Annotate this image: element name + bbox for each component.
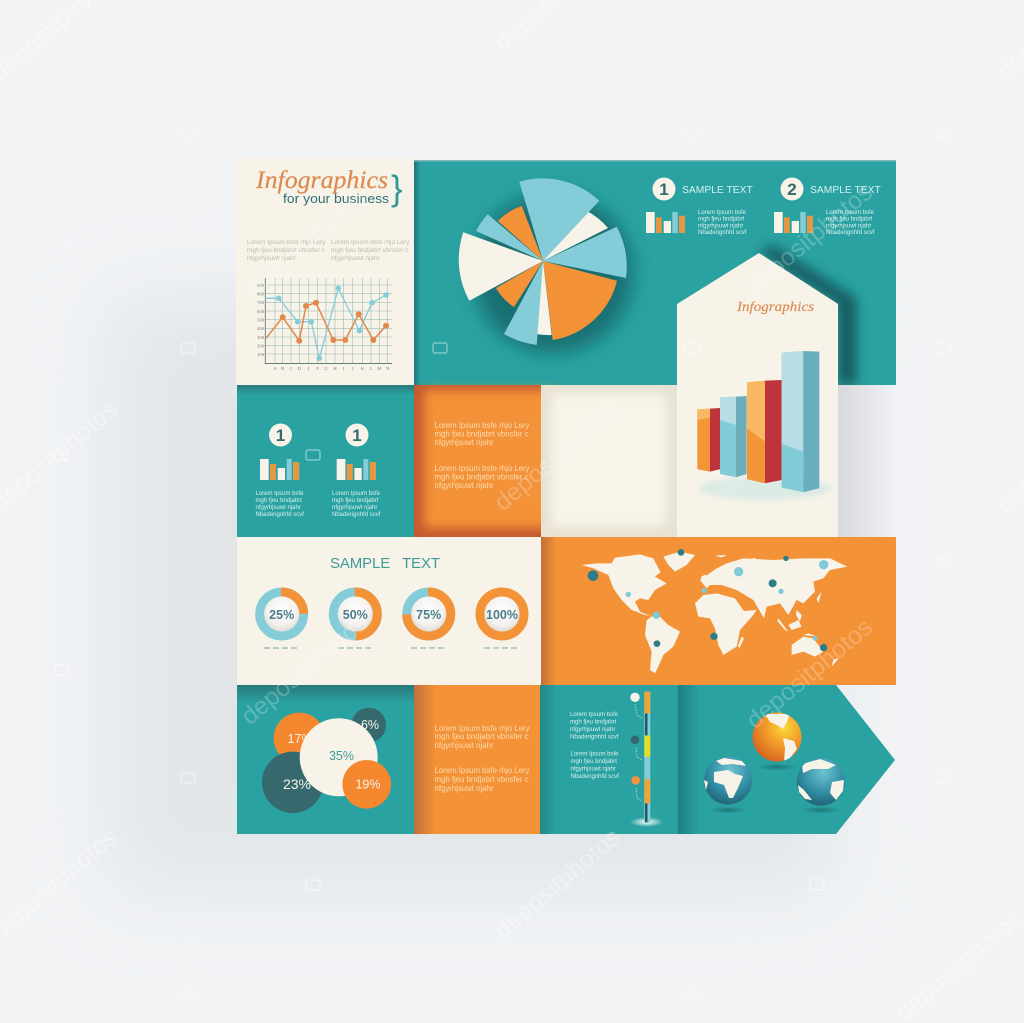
eurasia (700, 558, 847, 618)
text block: Lorem Ipsum bsfe (570, 712, 619, 718)
panel: teal row two: 1 (352, 426, 362, 445)
item 2: header sample text (774, 178, 881, 236)
3d bar chart (697, 351, 832, 500)
australia (792, 637, 823, 657)
text block: Nbaderignhfd scvf (256, 512, 304, 518)
donut 50% (333, 592, 377, 648)
pie chart (459, 178, 633, 353)
panel: sample text donuts (237, 537, 541, 685)
globe: orange (752, 712, 802, 770)
line chart: A (273, 366, 277, 371)
globe: blue left (704, 756, 752, 814)
panel: title card (236, 158, 414, 385)
donut 25%: 25% (269, 608, 294, 622)
donut 50%: 50% (343, 608, 368, 622)
text block: nfgyrhjsuwt njahr (332, 505, 377, 511)
text block: Lorem Ipsum bsfe rhjo Lery (434, 464, 530, 473)
series: blue (265, 286, 389, 361)
text block: mgh fjeu bndjabrt vbnsfer c (434, 732, 529, 741)
greenland (663, 552, 695, 572)
heading: Infographics (736, 300, 815, 315)
bar 4 (782, 351, 819, 492)
item 2: header sample text: SAMPLE TEXT (810, 185, 881, 196)
globe: blue right (797, 758, 845, 814)
panel: teal arrow with globes (678, 685, 895, 834)
watermarks: depositphotos (489, 395, 626, 517)
mini bar chart (774, 212, 813, 233)
bar 1 (697, 408, 720, 472)
line chart: 700 (257, 300, 265, 305)
bubble 23% (262, 752, 323, 813)
uk (701, 574, 707, 582)
badge 1 (652, 178, 676, 200)
panel: teal row two: 1 (276, 426, 285, 445)
world map (582, 549, 847, 673)
text block: left column: mgh fjeu bndjabrt vbnsfer c (247, 247, 325, 254)
line chart: 800 (257, 292, 265, 296)
islands (777, 592, 822, 637)
line chart: D (298, 366, 302, 371)
panel: orange bevelled text (414, 385, 554, 537)
text block (698, 210, 747, 236)
watermarks: depositphotos (236, 609, 373, 731)
house shadow (759, 245, 856, 385)
watermarks: depositphotos (489, 823, 626, 945)
text block: left column (247, 239, 326, 262)
subtitle: for your business (283, 191, 389, 206)
text block: mgh fjeu bndjabrt (570, 759, 617, 765)
line chart: C (289, 366, 293, 371)
text block: nfgyrhjsuwt njahr (256, 505, 301, 511)
donut 75%: 75% (416, 608, 441, 622)
text block: nfgyrhjsuwt njahr (826, 223, 871, 229)
line chart: H (333, 366, 337, 371)
bubble 23%: 23% (283, 776, 311, 792)
text block: right column (331, 239, 410, 262)
text block: Nbaderignhfd scvf (570, 774, 619, 780)
bubble 6%: 6% (361, 718, 379, 732)
badge 2 (780, 178, 804, 200)
line chart: K (361, 366, 365, 371)
map markers (588, 549, 828, 651)
bubble 19%: 19% (355, 778, 381, 792)
panel: house card (677, 253, 838, 537)
text block: Lorem Ipsum bsfe rhjo Lery (434, 766, 530, 775)
south america (645, 613, 680, 673)
text block (332, 491, 381, 518)
item 1: header sample text: 1 (659, 180, 669, 199)
text block (570, 712, 619, 780)
line chart: M (377, 366, 381, 371)
donut 25% (260, 592, 304, 648)
slices (459, 178, 627, 345)
text block: right column: Lorem Ipsum bsfe rhjo Lery (331, 239, 410, 246)
panel: teal row two (237, 385, 414, 537)
item 1: header sample text: SAMPLE TEXT (682, 185, 753, 196)
series: orange (266, 300, 389, 344)
bubble 6% (351, 708, 386, 742)
text block: mgh fjeu bndjabrt (570, 720, 617, 726)
text block: left column: nfgyrhjsuwt njahr (247, 255, 297, 262)
line chart: L (370, 366, 373, 371)
text block: Nbaderignhfd scvf (570, 734, 619, 740)
text block: mgh fjeu bndjabrt (332, 498, 379, 504)
text block (256, 491, 304, 518)
new zealand (832, 658, 839, 667)
text block: Lorem Ipsum bsfe rhjo Lery (434, 724, 530, 733)
line chart (257, 278, 392, 371)
panel: orange world map (541, 537, 896, 685)
line chart: G (324, 366, 328, 371)
text block: Nbaderignhfd scvf (698, 230, 747, 236)
bubble 17%: 17% (287, 732, 313, 746)
mini bar chart (337, 459, 376, 480)
panel: teal bubbles (237, 685, 414, 834)
north america (582, 554, 667, 617)
camera watermark icons (55, 128, 950, 998)
text block: nfgyrhjsuwt njahr (434, 741, 494, 750)
panel: orange text lower (414, 685, 540, 834)
text block: nfgyrhjsuwt njahr (434, 481, 494, 490)
text block: mgh fjeu bndjabrt (256, 498, 302, 504)
item 1: header sample text (646, 178, 753, 236)
line chart: I (308, 366, 310, 371)
text block (826, 210, 875, 236)
africa (695, 593, 757, 655)
line chart: 300 (257, 335, 265, 340)
watermarks: depositphotos (741, 178, 878, 300)
line chart: 200 (257, 344, 265, 348)
title: Infographics (255, 167, 388, 194)
line chart: B (281, 366, 284, 371)
text block: Lorem Ipsum bsfe (256, 491, 304, 497)
line chart: I (343, 366, 345, 371)
panel: teal header (414, 160, 896, 385)
text block: Nbaderignhfd scvf (332, 512, 381, 518)
bubble 17% (274, 713, 325, 764)
watermarks: depositphotos (236, 183, 373, 305)
item 2: header sample text: 2 (787, 180, 797, 199)
line chart: J (352, 366, 354, 371)
line chart: 500 (257, 318, 265, 322)
mini bar chart (646, 212, 685, 233)
watermarks: depositphotos (741, 613, 878, 735)
line chart: 600 (257, 309, 265, 314)
donut 100% (480, 592, 524, 648)
line chart: 100 (257, 352, 265, 357)
text block: Lorem Ipsum bsfe (698, 210, 747, 216)
line chart: 900 (257, 283, 265, 288)
bubble 19% (342, 760, 391, 809)
text block: mgh fjeu bndjabrt vbnsfer c (434, 775, 529, 784)
heading: SAMPLE TEXT (330, 555, 440, 572)
mini bar chart (260, 459, 299, 480)
text block: Lorem Ipsum bsfe (332, 491, 381, 497)
text block: Lorem Ipsum bsfe rhjo Lery (434, 421, 530, 430)
text block: nfgyrhjsuwt njahr (570, 727, 615, 733)
text block (434, 421, 530, 490)
text block: nfgyrhjsuwt njahr (434, 784, 494, 793)
text block: nfgyrhjsuwt njahr (698, 223, 743, 229)
panel: teal timeline (540, 685, 678, 834)
bar 3 (747, 380, 782, 483)
line chart: N (386, 366, 390, 371)
donut 75% (407, 592, 451, 648)
line chart: 400 (257, 326, 265, 331)
timeline (630, 692, 664, 827)
bubble 35%: 35% (329, 749, 354, 763)
text block: right column: mgh fjeu bndjabrt vbnsfer c (331, 247, 409, 254)
text block: nfgyrhjsuwt njahr (570, 766, 616, 772)
panel: side strip right of house (838, 385, 896, 537)
text block: Lorem Ipsum bsfe (570, 752, 619, 758)
badge (346, 424, 368, 446)
text block (434, 724, 530, 793)
text block: mgh fjeu bndjabrt vbnsfer c (434, 472, 529, 482)
text block: Lorem Ipsum bsfe (826, 210, 875, 216)
bar 2 (720, 396, 747, 477)
badge (269, 424, 292, 446)
donut 100%: 100% (486, 608, 518, 622)
text block: right column: nfgyrhjsuwt njahr (331, 255, 381, 262)
panel: cream bevel (541, 385, 677, 537)
bubble 35% (300, 718, 378, 796)
text block: Nbaderignhfd scvf (826, 230, 875, 236)
arctic islands (715, 555, 757, 562)
text block: mgh fjeu bndjabrt (826, 217, 873, 223)
text block: left column: Lorem Ipsum bsfe rhjo Lery (247, 239, 326, 246)
text block: nfgyrhjsuwt njahr (434, 438, 494, 447)
text block: mgh fjeu bndjabrt (698, 217, 745, 223)
line chart: F (316, 366, 319, 371)
madagascar (738, 637, 744, 648)
brace: } (391, 169, 403, 208)
text block: mgh fjeu bndjabrt vbnsfer c (434, 430, 529, 438)
